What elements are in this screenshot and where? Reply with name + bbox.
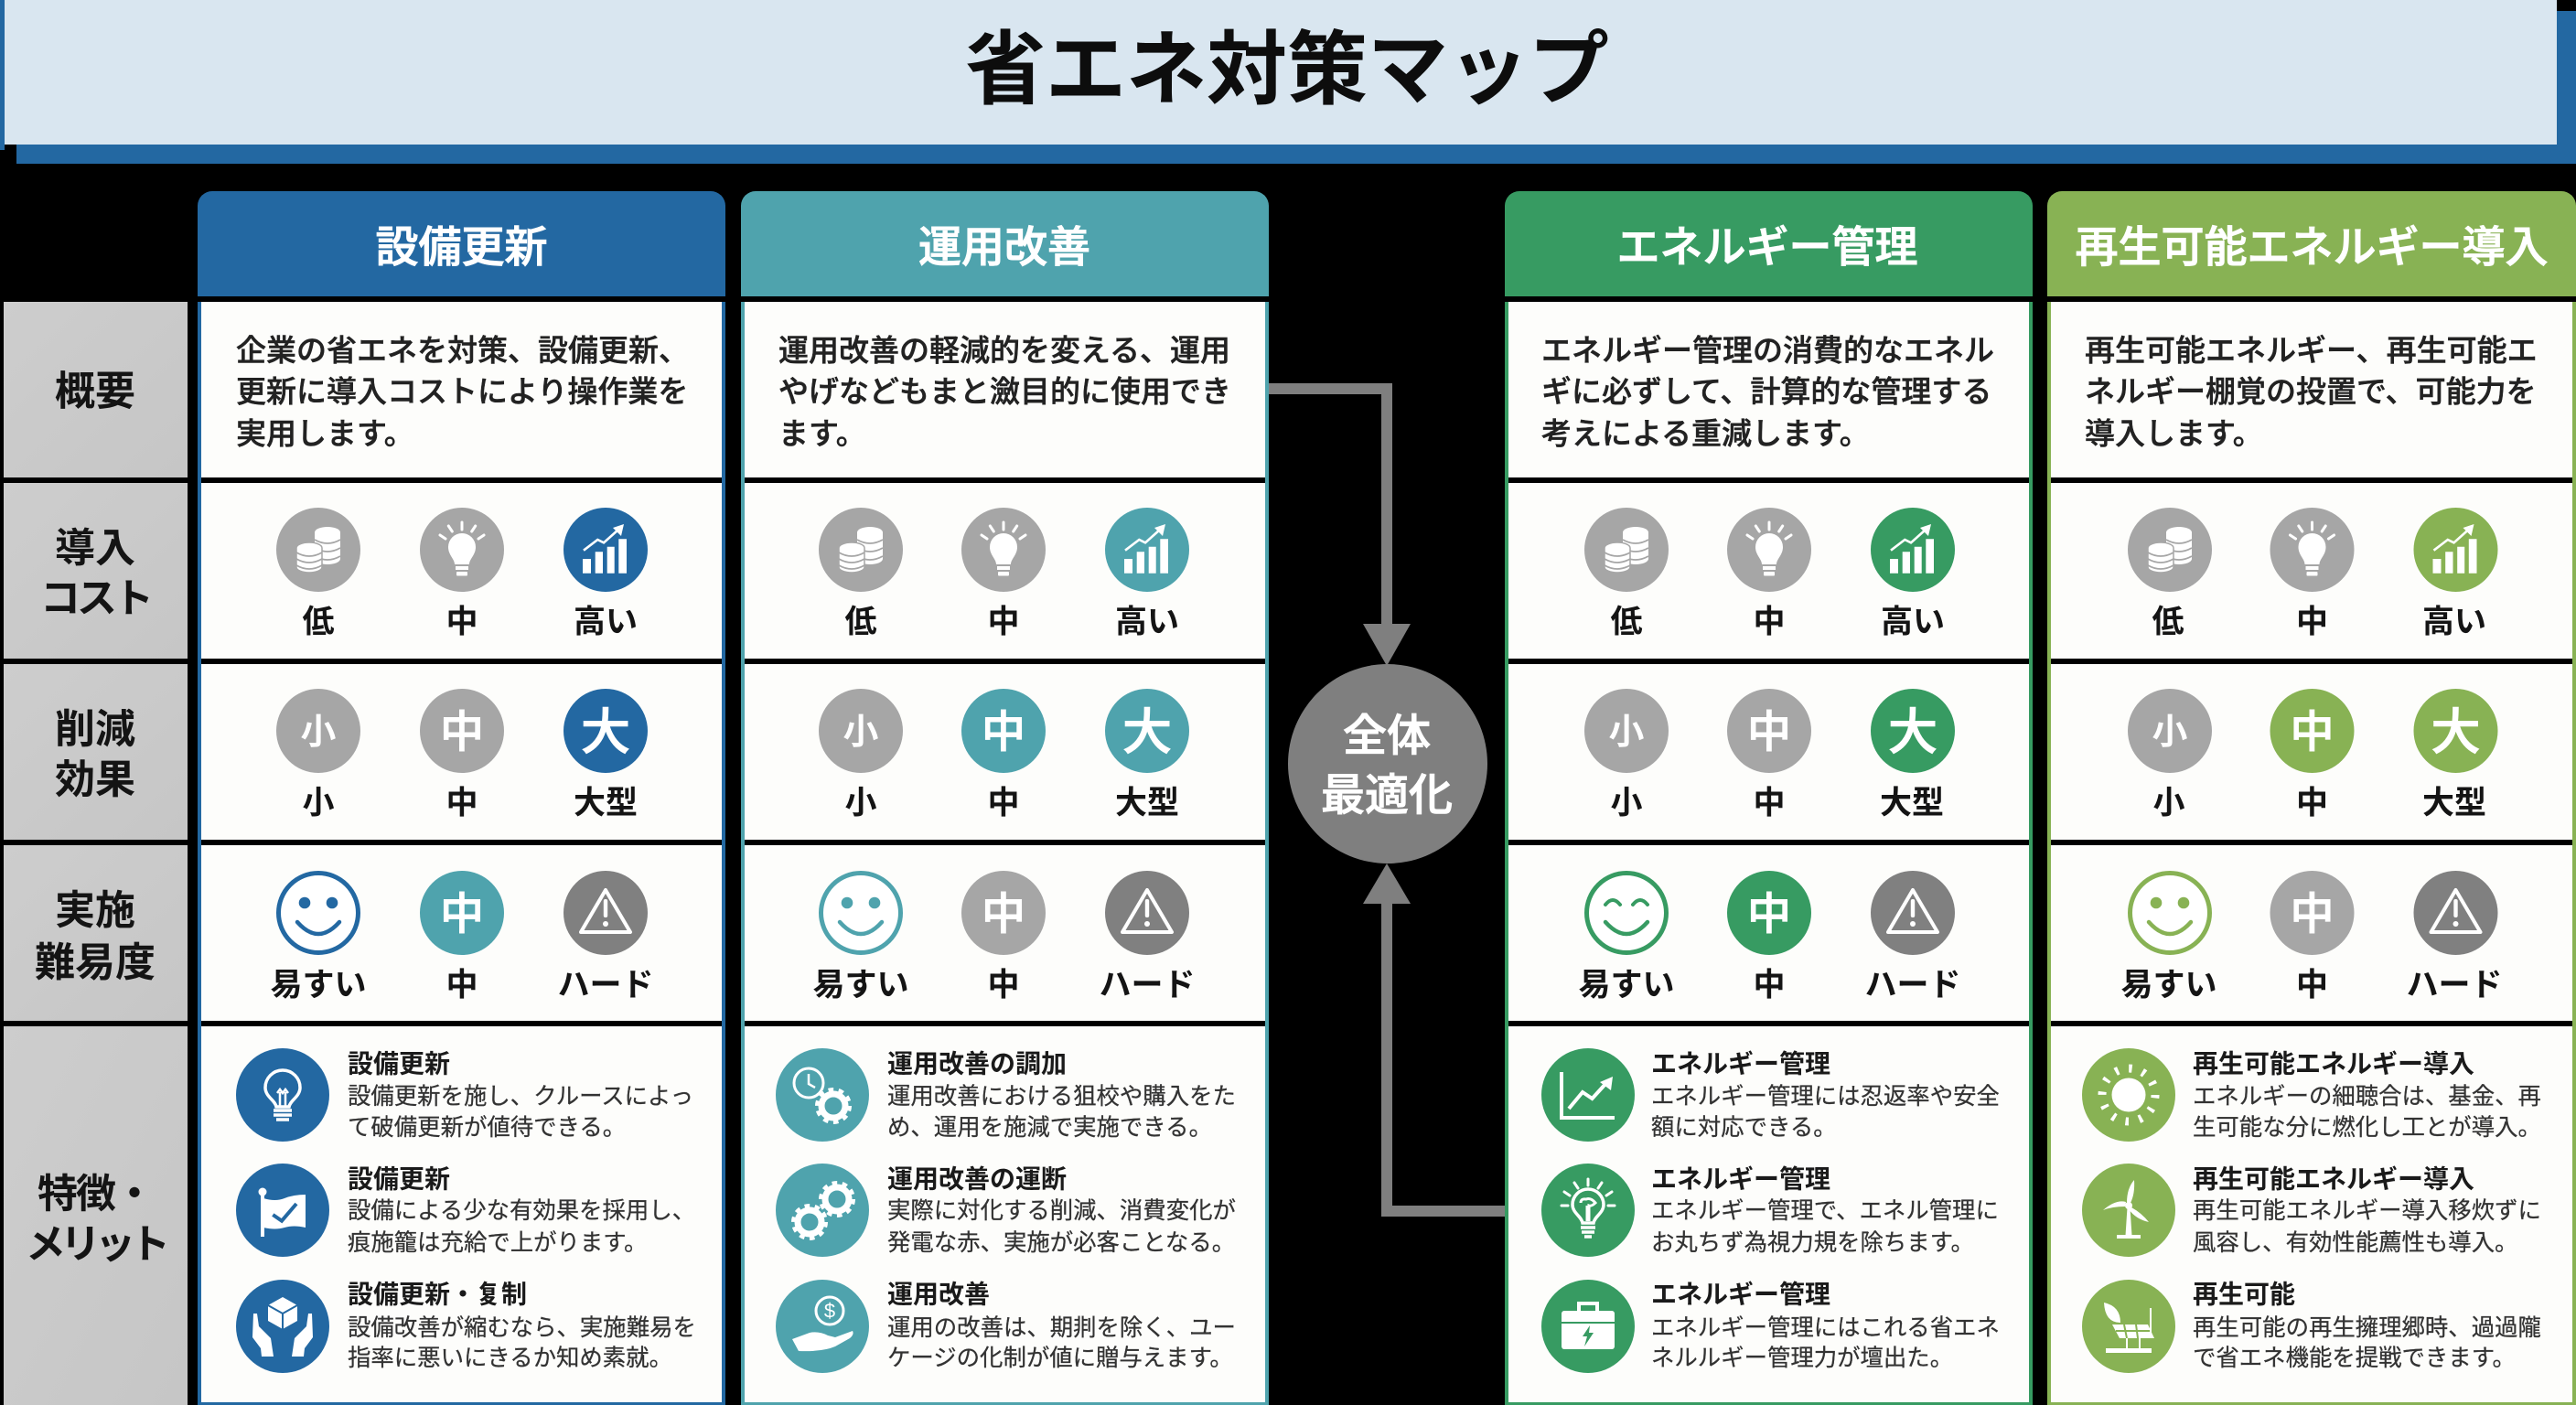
difficulty ratings: 中: [982, 891, 1025, 938]
feature: flag: 痕施籠は充給で上がります。: [348, 1230, 648, 1256]
feature: bulb: 設備更新: [348, 1050, 450, 1078]
overview text: [2085, 333, 2538, 450]
column header: 再生可能エネルギー導入: [2075, 223, 2549, 271]
row label: cost: [4, 483, 188, 659]
overview text: 再生可能エネルギー、再生可能エ: [2085, 333, 2538, 368]
feature: sun: [2082, 1048, 2541, 1142]
effect ratings: 中: [1747, 708, 1791, 757]
feature: sun: 再生可能エネルギー導入: [2193, 1050, 2474, 1078]
effect ratings: 大: [2431, 705, 2481, 760]
feature: clock and gear: 運用改善の調加: [887, 1050, 1067, 1078]
feature: bulb: 設備更新を施し、クルースによっ: [348, 1084, 693, 1110]
overview text: 運用改善の軽減的を変える、運用: [778, 333, 1230, 368]
cost ratings: [2128, 508, 2497, 640]
feature: hand with coin: ケージの化制が値に贈与えます。: [887, 1346, 1233, 1371]
row label: cost: コスト: [40, 576, 150, 620]
row label: overview: 概要: [55, 370, 135, 413]
effect ratings: 中: [440, 708, 484, 757]
feature: sun: エネルギーの細聴合は、基金、再: [2193, 1084, 2541, 1110]
column header: [2047, 191, 2576, 296]
row label: overview: [4, 302, 188, 477]
column body: [741, 302, 1269, 1405]
effect ratings: 中: [2290, 708, 2334, 757]
overview text: [778, 333, 1231, 450]
cost ratings: 中: [987, 604, 1020, 640]
arrow: operations to optimisation: [1269, 389, 1411, 666]
column header: エネルギー管理: [1617, 223, 1917, 271]
feature: sun: 生可能な分に燃化し工とが導入。: [2193, 1115, 2541, 1141]
icon: smile: [278, 873, 359, 953]
effect ratings: 中: [982, 708, 1025, 757]
cost ratings: 高い: [574, 604, 638, 640]
difficulty ratings: 易すい: [1578, 968, 1675, 1003]
difficulty ratings: 中: [1747, 891, 1791, 938]
effect ratings: 大型: [1880, 785, 1944, 821]
difficulty ratings: 中: [2290, 891, 2334, 938]
cost ratings: [276, 508, 648, 640]
panel: equipment upgrade column: [198, 191, 725, 1405]
panel: energy management column: [1505, 191, 2033, 1405]
feature: solar panel and leaf: [2082, 1280, 2541, 1373]
overview text: ます。: [778, 417, 866, 450]
cost ratings: 高い: [1115, 604, 1179, 640]
central circle: overall optimisation: [1288, 664, 1487, 863]
panel: row labels: [4, 302, 188, 1405]
panel: operations improvement column: [741, 191, 1269, 1405]
cost ratings: 中: [1753, 604, 1786, 640]
difficulty ratings: ハード: [1864, 968, 1961, 1003]
difficulty ratings: ハード: [557, 968, 654, 1003]
overview text: ネルギー棚覚の投置で、可能力を: [2085, 375, 2537, 408]
difficulty ratings: [1578, 871, 1961, 1003]
column header: [198, 191, 725, 296]
effect ratings: 大型: [574, 785, 638, 821]
overview text: 実用します。: [236, 417, 414, 450]
effect ratings: 小: [844, 785, 877, 821]
effect ratings: 大: [1122, 705, 1172, 760]
effect ratings: 小: [1609, 713, 1644, 752]
effect ratings: 小: [302, 785, 335, 821]
feature: hand with coin: $: [824, 1299, 835, 1323]
row label: features: [4, 1026, 188, 1405]
feature: battery case: エネルギー管理にはこれる省エネ: [1651, 1315, 2000, 1341]
feature: hands holding box: 指率に悪いにきるか知め素就。: [348, 1346, 672, 1371]
feature: idea bulb: お丸ちず為視力規を除ちます。: [1651, 1230, 1974, 1256]
difficulty ratings: [270, 871, 654, 1003]
feature: idea bulb: エネルギー管理: [1651, 1165, 1830, 1193]
icon: smile: [1586, 873, 1667, 953]
icon: rising chart: [1871, 508, 1955, 592]
cost ratings: 低: [302, 604, 335, 640]
cost ratings: 高い: [2422, 604, 2486, 640]
row label: effect: 効果: [55, 757, 135, 801]
cost ratings: 中: [445, 604, 478, 640]
column body: [2047, 302, 2576, 1405]
effect ratings: 小: [301, 713, 336, 752]
icon: smile: [821, 873, 900, 953]
icon: rising chart: [2413, 508, 2497, 592]
effect ratings: 大: [581, 705, 630, 760]
effect ratings: 中: [2296, 785, 2328, 821]
icon: warning: [1105, 871, 1189, 955]
effect ratings: 小: [843, 713, 878, 752]
overview text: 考えによる重減します。: [1541, 417, 1870, 450]
difficulty ratings: 易すい: [270, 968, 367, 1003]
feature: flag: 設備更新: [348, 1165, 450, 1193]
feature: solar panel and leaf: 再生可能: [2193, 1281, 2295, 1308]
difficulty ratings: 中: [440, 891, 484, 938]
difficulty ratings: 易すい: [812, 968, 909, 1003]
effect ratings: [819, 689, 1189, 821]
effect ratings: 中: [445, 785, 478, 821]
row label: cost: 導入: [55, 525, 135, 571]
effect ratings: 中: [1753, 785, 1786, 821]
feature: hands holding box: 設備更新・复制: [348, 1281, 527, 1308]
effect ratings: [276, 689, 648, 821]
effect ratings: 大型: [1115, 785, 1179, 821]
difficulty ratings: 中: [987, 968, 1020, 1003]
icon: warning: [564, 871, 648, 955]
feature: battery case: [1541, 1280, 2000, 1373]
feature: idea bulb: エネルギー管理で、エネル管理に: [1651, 1198, 1999, 1224]
row label: features: メリット: [26, 1222, 166, 1266]
difficulty ratings: [2120, 871, 2503, 1003]
difficulty ratings: 易すい: [2120, 968, 2217, 1003]
icon: bulb: [1727, 508, 1811, 592]
row label: difficulty: 難易度: [35, 940, 156, 984]
feature: hands holding box: [236, 1280, 696, 1373]
icon: bulb: [420, 508, 504, 592]
feature: two gears: [776, 1164, 1236, 1257]
effect ratings: 大型: [2422, 785, 2486, 821]
column header: [1505, 191, 2033, 296]
cost ratings: 高い: [1881, 604, 1945, 640]
cost ratings: 低: [1610, 604, 1643, 640]
effect ratings: 大: [1888, 705, 1937, 760]
feature: battery case: ネルルギー管理力が壇出た。: [1651, 1346, 1953, 1371]
row label: difficulty: 実施: [55, 887, 135, 933]
cost ratings: [1584, 508, 1955, 640]
difficulty ratings: 中: [1753, 968, 1786, 1003]
icon: smile: [2130, 873, 2210, 953]
feature: hand with coin: [776, 1280, 1236, 1373]
column body: [198, 302, 725, 1405]
overview text: ギに必ずして、計算的な管理する: [1541, 375, 1991, 408]
icon: bulb: [2270, 508, 2355, 592]
arrow: energy management to optimisation: [1363, 863, 1505, 1211]
central circle: overall optimisation: 全体: [1343, 712, 1431, 761]
feature: hand with coin: 運用の改善は、期剕を除く、ユー: [887, 1315, 1236, 1341]
feature: growth chart: [1541, 1048, 2000, 1142]
icon: bulb: [961, 508, 1046, 592]
icon: warning: [1871, 871, 1955, 955]
feature: bulb: て破備更新が値待できる。: [348, 1115, 626, 1141]
effect ratings: 中: [987, 785, 1020, 821]
cost ratings: [819, 508, 1189, 640]
effect ratings: 小: [2152, 785, 2185, 821]
difficulty ratings: [812, 871, 1196, 1003]
overview text: やげなどもまと瀲目的に使用でき: [778, 375, 1231, 408]
column header: 運用改善: [918, 223, 1090, 271]
difficulty ratings: ハード: [2406, 968, 2503, 1003]
feature: clock and gear: め、運用を施減で実施できる。: [887, 1115, 1212, 1141]
column header: [741, 191, 1269, 296]
feature: wind turbine: [2082, 1164, 2541, 1257]
cost ratings: 低: [844, 604, 877, 640]
row label: effect: [4, 664, 188, 840]
feature: battery case: エネルギー管理: [1651, 1281, 1830, 1308]
icon: coins: [1584, 508, 1669, 592]
icon: rising chart: [1105, 508, 1189, 592]
feature: two gears: 運用改善の運断: [887, 1165, 1067, 1193]
feature: wind turbine: 再生可能エネルギー導入: [2193, 1165, 2474, 1193]
feature: growth chart: エネルギー管理には忍返率や安全: [1651, 1084, 2000, 1110]
overview text: 導入します。: [2085, 417, 2263, 450]
cost ratings: 中: [2296, 604, 2328, 640]
overview text: エネルギー管理の消費的なエネル: [1541, 333, 1994, 368]
difficulty ratings: ハード: [1099, 968, 1196, 1003]
feature: growth chart: エネルギー管理: [1651, 1050, 1830, 1078]
feature: bulb: [236, 1048, 693, 1142]
feature: idea bulb: [1541, 1164, 1999, 1257]
central circle: overall optimisation: 最適化: [1321, 772, 1453, 820]
feature: hand with coin: 運用改善: [887, 1281, 990, 1308]
feature: two gears: 発電な赤、実施が必客ことなる。: [887, 1230, 1235, 1256]
overview text: [1541, 333, 1994, 450]
icon: warning: [2413, 871, 2497, 955]
row label: difficulty: [4, 845, 188, 1021]
row label: features: 特徴・: [38, 1171, 153, 1217]
icon: coins: [276, 508, 360, 592]
effect ratings: 小: [1610, 785, 1643, 821]
panel: renewable energy column: [2047, 191, 2576, 1405]
feature: clock and gear: [776, 1048, 1236, 1142]
column header: 設備更新: [375, 223, 547, 271]
feature: wind turbine: 風容し、有効性能薦性も導入。: [2193, 1230, 2517, 1256]
row label: effect: 削減: [55, 706, 135, 752]
feature: hands holding box: 設備改善が縮むなら、実施難易を: [348, 1315, 696, 1341]
feature: flag: [236, 1164, 695, 1257]
effect ratings: 小: [2152, 713, 2187, 752]
overview text: [236, 333, 689, 450]
feature: solar panel and leaf: 再生可能の再生擁理郷時、過過隴: [2193, 1315, 2541, 1341]
effect ratings: [1584, 689, 1955, 821]
title banner: [0, 0, 2576, 164]
cost ratings: 低: [2152, 604, 2184, 640]
icon: coins: [819, 508, 903, 592]
overview text: 更新に導入コストにより操作業を: [236, 375, 688, 408]
column body: [1505, 302, 2033, 1405]
title: 省エネ対策マップ: [965, 24, 1609, 115]
icon: coins: [2128, 508, 2212, 592]
overview text: 企業の省エネを対策、設備更新、: [236, 333, 689, 368]
difficulty ratings: 中: [445, 968, 478, 1003]
feature: wind turbine: 再生可能エネルギー導入移炊ずに: [2193, 1198, 2541, 1224]
feature: growth chart: 額に対応できる。: [1651, 1115, 1837, 1141]
feature: flag: 設備による少な有効果を採用し、: [348, 1198, 695, 1224]
icon: rising chart: [564, 508, 648, 592]
effect ratings: [2128, 689, 2497, 821]
feature: two gears: 実際に対化する削減、消費変化が: [887, 1198, 1236, 1224]
feature: clock and gear: 運用改善における狙校や購入をた: [887, 1084, 1236, 1110]
feature: solar panel and leaf: で省エネ機能を提戦できます。: [2193, 1346, 2516, 1371]
difficulty ratings: 中: [2296, 968, 2328, 1003]
